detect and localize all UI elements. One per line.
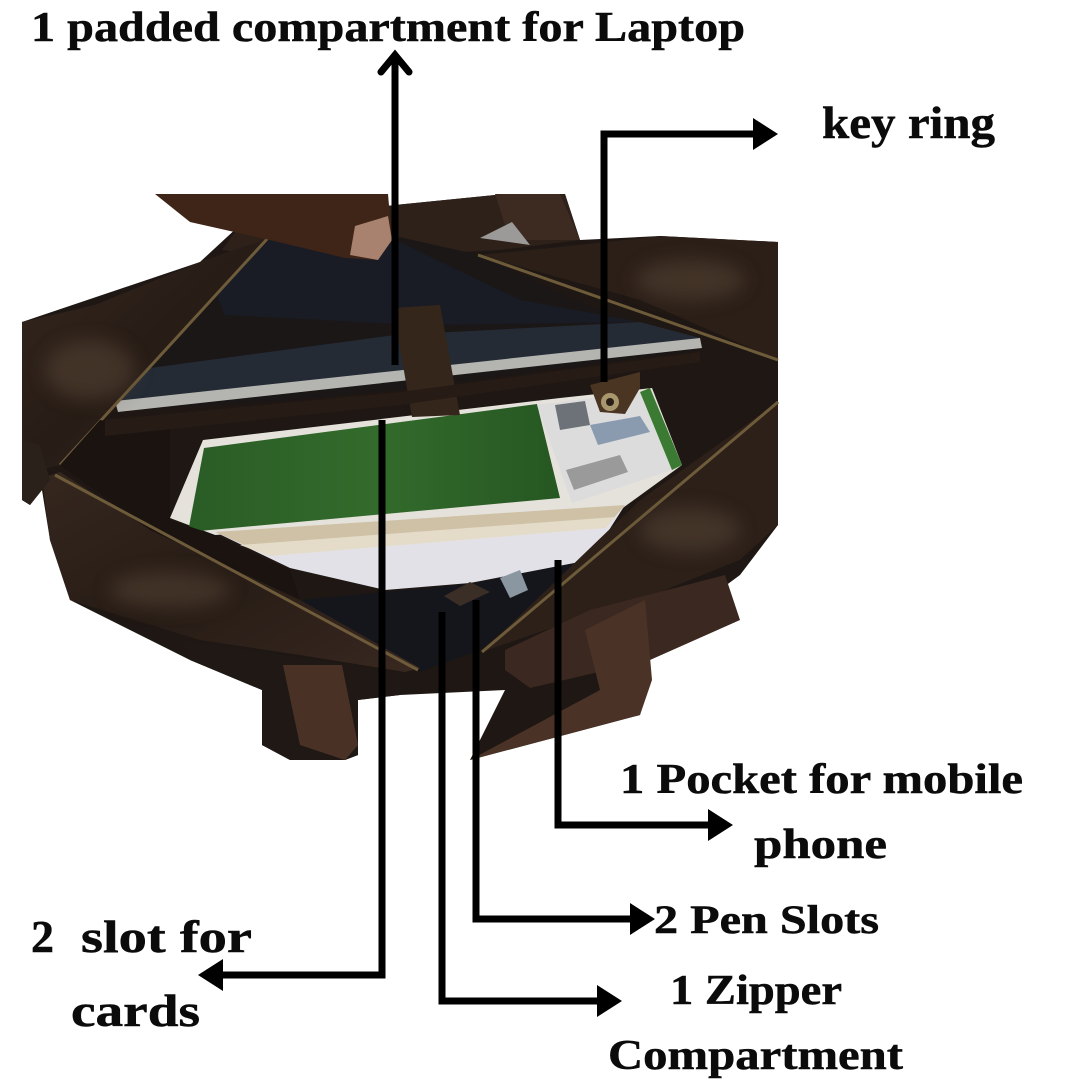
label: zipper compartment: 1 Zipper xyxy=(670,967,842,1014)
bag silhouette base xyxy=(22,194,778,760)
label: card slots: 2 xyxy=(31,911,54,962)
arrow: key ring xyxy=(604,118,778,382)
arrow: card slots xyxy=(198,420,382,991)
bottom right flap xyxy=(482,402,778,652)
arrow: laptop compartment xyxy=(381,55,409,365)
key ring hardware xyxy=(590,372,640,414)
leather mottling xyxy=(45,260,745,608)
label: zipper compartment xyxy=(608,967,903,1079)
label: card slots: cards xyxy=(71,985,200,1036)
photo: open leather laptop bag xyxy=(22,194,778,760)
label: card slots xyxy=(31,911,252,1036)
inner dark divider xyxy=(60,350,778,520)
bag top handles xyxy=(222,194,580,260)
zipper pulls xyxy=(444,570,528,606)
arrow: pen slots xyxy=(476,600,655,935)
front pocket band xyxy=(105,352,700,436)
label: key ring: key ring xyxy=(822,97,995,148)
buckle left edge xyxy=(22,440,50,505)
label: mobile pocket xyxy=(620,756,1023,868)
lower front pocket xyxy=(300,560,590,672)
bottom left flap xyxy=(42,472,420,672)
printed label card xyxy=(537,388,682,503)
white paper sheet xyxy=(170,388,682,535)
label: mobile pocket: phone xyxy=(754,821,887,868)
arrow: mobile phone pocket xyxy=(558,560,733,841)
left end opening xyxy=(60,420,300,600)
hand xyxy=(155,194,392,260)
left bottom strap xyxy=(180,640,400,760)
green grass cover xyxy=(188,404,560,532)
back panel of bag xyxy=(120,235,700,410)
label: card slots: slot for xyxy=(81,911,252,962)
label: zipper compartment: Compartment xyxy=(608,1032,903,1079)
right top zip flap xyxy=(478,236,778,360)
arrow: zipper compartment xyxy=(442,612,622,1017)
label: laptop compartment: 1 padded compartment for Laptop xyxy=(31,4,745,51)
laptop xyxy=(115,322,702,412)
notebook xyxy=(215,505,625,590)
back pocket denim lining xyxy=(215,240,640,325)
left top zip flap xyxy=(22,238,268,470)
top handle centre strap xyxy=(393,305,460,417)
label: mobile pocket: 1 Pocket for mobile xyxy=(620,756,1023,803)
right bottom strap xyxy=(470,575,740,760)
label: pen slots: 2 Pen Slots xyxy=(654,897,879,942)
